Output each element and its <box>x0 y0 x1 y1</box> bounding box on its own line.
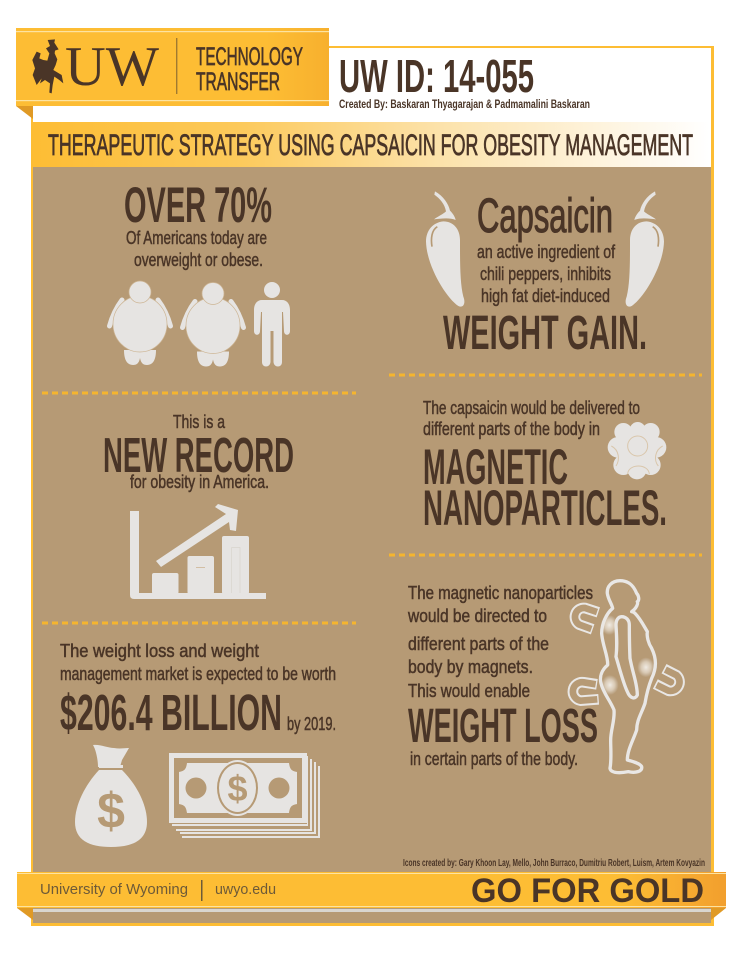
technology transfer label: TECHNOLOGY <box>196 43 303 71</box>
divider <box>42 375 702 623</box>
icon: rising bar chart <box>130 504 266 599</box>
magnet explanation text: body by magnets. <box>408 657 533 677</box>
capsaicin description: chili peppers, inhibits <box>480 264 611 284</box>
magnet explanation text: This would enable <box>408 681 530 701</box>
technology transfer label <box>196 43 303 96</box>
market value figure: by 2019. <box>287 714 336 734</box>
icon: money bag <box>75 745 147 847</box>
university name and url: University of Wyoming <box>40 881 188 898</box>
delivery text <box>423 398 640 439</box>
magnetic nanoparticles heading: MAGNETIC <box>423 439 568 495</box>
new record text <box>103 412 294 492</box>
UW wordmark: UW <box>65 36 159 98</box>
icon: left chili pepper <box>426 191 464 307</box>
magnet explanation text: different parts of the <box>408 634 549 654</box>
market text: management market is expected to be worth <box>60 664 336 684</box>
icon: stack of banknotes: $ <box>227 768 248 809</box>
weight loss heading: WEIGHT LOSS <box>408 700 598 753</box>
capsaicin description <box>477 242 616 306</box>
new record text: for obesity in America. <box>130 472 269 492</box>
panel: weight loss <box>407 581 680 773</box>
capsaicin description: high fat diet-induced <box>481 286 610 306</box>
panel: magnetic nanoparticles <box>423 398 667 536</box>
icon: body outline with magnets <box>573 581 680 773</box>
magnet explanation text: The magnetic nanoparticles <box>408 583 593 603</box>
icon: money bag: $ <box>97 783 125 839</box>
go for gold slogan: GO FOR GOLD <box>471 872 704 910</box>
market value figure: $206.4 BILLION <box>60 684 282 741</box>
icon: stack of banknotes <box>169 753 320 838</box>
panel: capsaicin <box>426 190 664 360</box>
icon: bucking horse and rider <box>32 39 63 93</box>
delivery text: The capsaicin would be delivered to <box>423 398 640 418</box>
header ribbon <box>16 28 329 119</box>
footer ribbon <box>17 872 726 920</box>
new record text: This is a <box>173 412 226 432</box>
panel: market value <box>60 641 336 847</box>
magnet explanation text: would be directed to <box>407 606 547 626</box>
weight loss caption: in certain parts of the body. <box>410 749 578 769</box>
creators line: Created By: Baskaran Thyagarajan & Padmamalini Baskaran <box>339 99 590 111</box>
statistic caption: overweight or obese. <box>134 250 263 270</box>
statistic: OVER 70% <box>124 177 272 233</box>
capsaicin heading: Capsaicin <box>477 190 613 243</box>
icon: three people <box>110 281 290 366</box>
new record text: NEW RECORD <box>103 429 294 483</box>
market text <box>60 641 336 684</box>
magnet explanation text <box>407 583 593 701</box>
icon: nanoparticle cluster <box>608 422 666 479</box>
title banner <box>33 122 709 167</box>
technology transfer label: TRANSFER <box>196 68 280 96</box>
tan content panel <box>33 167 711 923</box>
panel: over 70% <box>110 177 290 366</box>
panel: new record <box>103 412 294 599</box>
UW ID heading: UW ID: 14-055 <box>339 50 534 102</box>
statistic caption: Of Americans today are <box>126 228 267 248</box>
capsaicin description: an active ingredient of <box>477 242 616 262</box>
university name and url: uwyo.edu <box>215 881 276 898</box>
university name and url <box>40 880 276 901</box>
icon: right chili pepper <box>626 191 664 307</box>
magnetic nanoparticles heading <box>423 439 667 536</box>
market text: The weight loss and weight <box>60 641 259 661</box>
statistic caption <box>126 228 267 270</box>
delivery text: different parts of the body in <box>423 419 600 439</box>
